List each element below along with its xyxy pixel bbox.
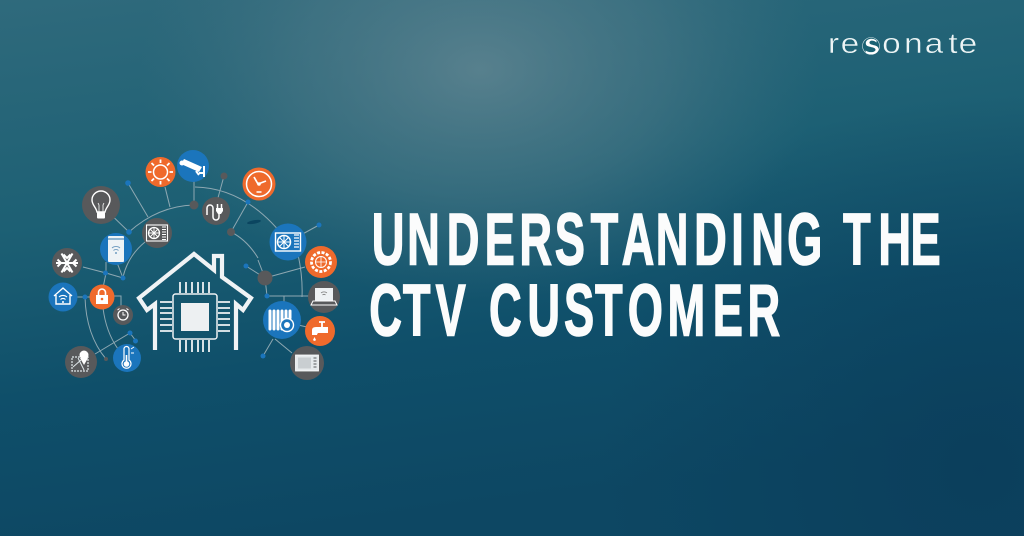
icon: radiator — [263, 301, 301, 339]
icon: blue air conditioner — [270, 224, 306, 260]
icon: map pin — [65, 346, 97, 378]
icon: snowflake — [52, 248, 82, 278]
icon: power plug — [202, 197, 230, 225]
icon: water tap — [305, 316, 335, 346]
house outline — [139, 254, 251, 350]
icon: air conditioner — [142, 218, 172, 248]
icon: clock — [242, 168, 276, 200]
icon: light bulb — [82, 186, 120, 224]
icon: alarm clock — [113, 305, 133, 325]
title — [369, 198, 941, 351]
connector lines — [63, 176, 319, 359]
icon: microwave — [290, 346, 324, 380]
icon: wifi home — [48, 282, 78, 312]
icon: laptop — [308, 281, 340, 313]
title line 2: CTV CUSTOMER — [369, 269, 780, 351]
icon: thermometer — [113, 344, 141, 372]
icon: sun — [146, 157, 176, 187]
logo: resonate: resonate — [828, 27, 977, 59]
icon: smartphone — [100, 233, 132, 265]
title line 1: UNDERSTANDING THE — [372, 198, 941, 280]
icon: security camera — [177, 150, 209, 182]
microchip — [160, 282, 230, 352]
icon: padlock — [90, 284, 114, 310]
connector nodes — [82, 172, 322, 361]
icon: gear — [305, 246, 337, 278]
